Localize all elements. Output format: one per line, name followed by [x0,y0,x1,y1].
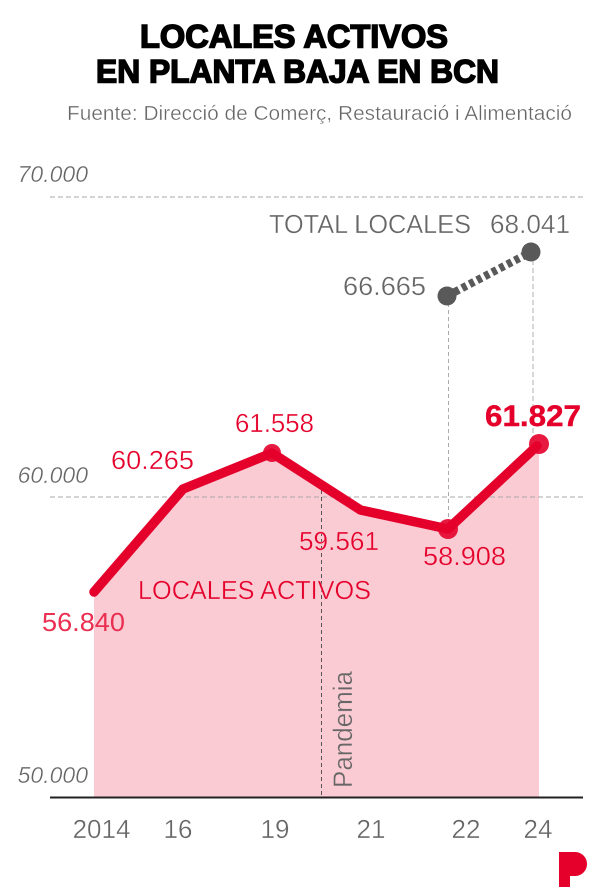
title: LOCALES ACTIVOS [140,18,448,54]
locales activos labels: LOCALES ACTIVOS [138,575,371,605]
locales activos labels: 61.827 [485,400,581,433]
title [96,18,499,90]
logo [559,852,587,887]
pandemic marker line [320,483,322,797]
locales activos labels: 58.908 [423,541,506,571]
y-axis labels [18,161,88,788]
locales activos labels: 56.840 [42,607,125,637]
locales activos line [94,434,549,592]
x-axis labels: 16 [164,814,192,844]
x-axis labels: 22 [452,814,480,844]
pandemic label: Pandemia [328,670,358,788]
x-axis labels: 21 [357,814,385,844]
title: EN PLANTA BAJA EN BCN [96,54,499,90]
x-axis labels [73,814,552,844]
gridlines [50,197,583,529]
y-axis labels: 50.000 [18,762,88,788]
area: locales activos [94,444,539,797]
total locales labels: TOTAL LOCALES [269,209,471,239]
x-axis labels: 19 [261,814,289,844]
locales activos labels: 59.561 [299,526,379,556]
locales activos labels [42,400,581,637]
axis baseline [50,796,583,798]
y-axis labels: 70.000 [18,161,88,187]
source text: Fuente: Direcció de Comerç, Restauració i Alimentació [67,103,572,125]
locales activos labels: 60.265 [111,445,194,475]
x-axis labels: 24 [524,814,552,844]
total locales labels: 68.041 [490,209,570,239]
locales activos labels: 61.558 [235,408,314,438]
total locales labels [269,209,570,301]
total locales series [438,242,540,306]
x-axis labels: 2014 [73,814,130,844]
y-axis labels: 60.000 [18,462,88,488]
total locales labels: 66.665 [343,271,426,301]
